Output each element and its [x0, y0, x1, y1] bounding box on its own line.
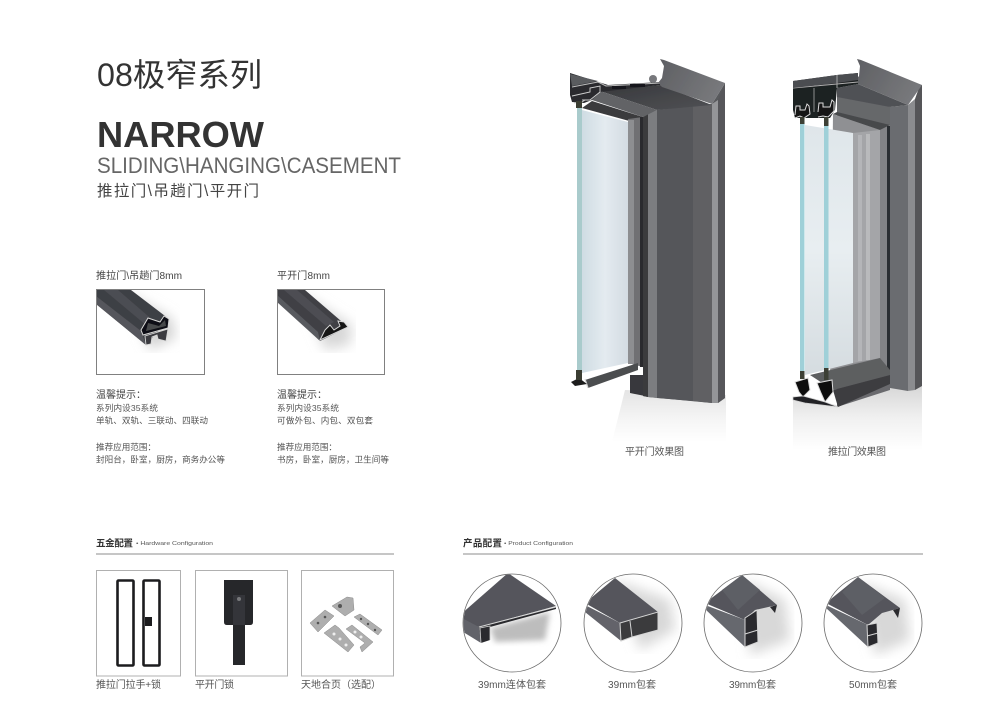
circle: 50mm casing [824, 574, 922, 691]
profile thumbnail: sliding [96, 290, 204, 374]
heading: hardware: • Hardware Configuration [136, 541, 213, 547]
card: casement lock: 平开门锁 [195, 678, 234, 691]
subheading: door types in English: SLIDING\HANGING\CASEMENT [97, 153, 401, 178]
circle: 50mm casing: 50mm包套 [849, 678, 897, 691]
label: casement profile: 平开门8mm [277, 269, 330, 282]
panel: product configuration [460, 538, 923, 691]
circle: 39mm casing A: 39mm包套 [608, 678, 656, 691]
circle: 39mm casing B [704, 574, 802, 691]
card: casement lock [195, 570, 288, 691]
tip text: sliding: 推荐应用范围： [96, 441, 156, 452]
circle: 39mm integrated casing: 39mm连体包套 [478, 678, 546, 691]
circle: 39mm casing B: 39mm包套 [729, 678, 776, 691]
tip text: casement: 可做外包、内包、双包套 [277, 414, 373, 426]
heading: NARROW: NARROW [97, 114, 264, 155]
panel: sliding and hanging door 8mm profile [96, 269, 225, 464]
heading: product [463, 538, 573, 550]
card: sliding door handle and lock [96, 570, 180, 691]
circle: 39mm integrated casing [460, 573, 561, 691]
tip text: sliding: 系列内设35系统 [96, 402, 158, 413]
card: sliding door handle and lock: 推拉门拉手+锁 [96, 678, 161, 691]
circle: 39mm casing A [584, 574, 682, 691]
heading: hardware: 五金配置 [96, 538, 133, 550]
sliding door illustration [793, 59, 922, 450]
caption: sliding door: 推拉门效果图 [828, 445, 886, 458]
card: pivot hinge [301, 570, 394, 691]
heading: hardware [96, 538, 213, 550]
tip text: casement: 书房，卧室，厨房，卫生间等 [277, 454, 389, 464]
tip text: sliding [96, 388, 225, 464]
panel: hardware configuration [96, 538, 394, 691]
heading: product: 产品配置 [463, 538, 502, 550]
casement door illustration [570, 59, 726, 442]
caption: casement door: 平开门效果图 [625, 445, 684, 458]
tip text: sliding: 单轨、双轨、三联动、四联动 [96, 414, 208, 426]
panel: casement door 8mm profile [277, 269, 389, 464]
card: pivot hinge: 天地合页（选配） [301, 678, 381, 691]
tip text: casement: 系列内设35系统 [277, 402, 339, 413]
tip text: casement: 温馨提示： [277, 388, 327, 401]
tip text: casement: 推荐应用范围： [277, 441, 337, 452]
profile thumbnail: casement [277, 290, 384, 374]
heading: product: • Product Configuration [504, 541, 573, 547]
title: series name: 08极窄系列 [97, 57, 262, 93]
title block [97, 57, 401, 200]
tip text: sliding: 封阳台，卧室，厨房，商务办公等 [96, 454, 225, 464]
label: sliding profile: 推拉门\吊趟门8mm [96, 269, 182, 282]
tip text: sliding: 温馨提示： [96, 388, 146, 401]
tip text: casement [277, 388, 389, 464]
subheading: door types in Chinese: 推拉门\吊趟门\平开门 [97, 182, 259, 200]
